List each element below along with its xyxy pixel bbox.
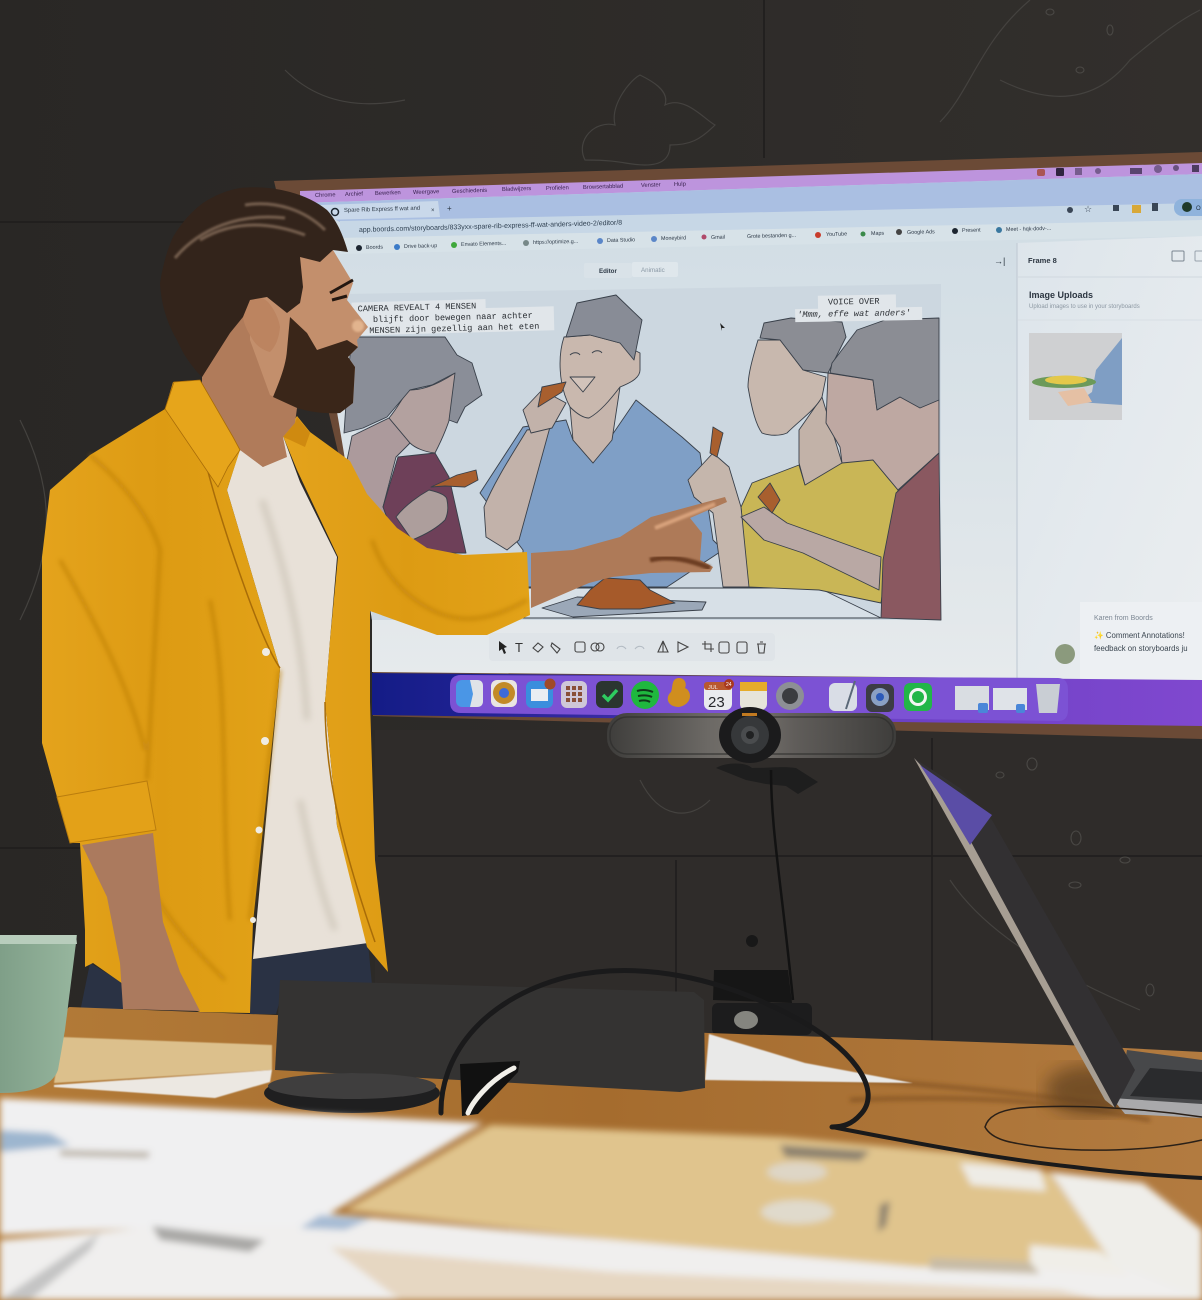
paper markings <box>767 1162 827 1182</box>
cable under webcam <box>771 770 793 1000</box>
right forearm and hand <box>531 497 727 608</box>
caption left <box>352 297 554 337</box>
illustrated woman left <box>344 337 482 553</box>
macOS menu bar: Archief <box>345 191 363 198</box>
browser chrome <box>300 174 1202 254</box>
lower white and peach sheets <box>0 1213 1202 1300</box>
drawing toolbar <box>489 633 775 661</box>
right sidebar: Upload images to use in your storyboards <box>1029 304 1140 310</box>
macOS menu bar: Browsertabblad <box>583 184 623 191</box>
browser chrome: Maps <box>871 231 885 237</box>
charging puck <box>264 1073 440 1113</box>
right sidebar: Frame 8 <box>1028 256 1057 265</box>
browser chrome: Grote bestanden g... <box>747 233 796 240</box>
macOS menu bar <box>300 163 1202 203</box>
browser chrome: Data Studio <box>607 237 635 244</box>
blurred foreground papers <box>0 1098 1202 1300</box>
beard <box>273 317 358 413</box>
table top <box>0 1007 1202 1300</box>
left white paper <box>0 1098 483 1235</box>
illustrated plate of chicken <box>542 578 706 617</box>
right sidebar: Image Uploads <box>1029 290 1093 300</box>
laptop screen reflection <box>920 765 992 845</box>
browser chrome: YouTube <box>826 231 847 238</box>
papers on the table <box>54 1034 913 1098</box>
webcam soundbar <box>607 707 896 794</box>
black and white cables <box>441 971 1202 1150</box>
browser chrome: Meet - hqk-dodv-... <box>1006 226 1051 233</box>
screen frame <box>274 152 1202 739</box>
macOS menu bar: Bewerken <box>375 190 401 197</box>
macOS dock <box>372 673 1202 726</box>
browser chrome: Moneybird <box>661 235 686 242</box>
laptop hinge and keyboard base <box>1112 1050 1202 1118</box>
macOS menu bar: Profielen <box>546 185 569 192</box>
right sidebar: →| <box>994 256 1005 266</box>
cable over papers <box>832 1127 1202 1178</box>
shirt front right panel and arm <box>283 416 530 972</box>
chat bubble <box>1080 602 1202 680</box>
browser chrome: Present <box>962 228 981 234</box>
dock app icons: 23 <box>708 694 725 711</box>
cable port <box>460 1061 520 1116</box>
placket buttons <box>204 446 270 923</box>
face <box>250 250 368 413</box>
tan paper <box>345 1125 1112 1267</box>
laptop edge strip <box>914 758 1115 1108</box>
right sidebar <box>994 236 1202 680</box>
shirt cuff left <box>57 781 156 843</box>
laptop screen back <box>914 758 1135 1108</box>
editor tabs: Editor <box>599 268 617 275</box>
illustrated man centre <box>480 295 723 587</box>
browser chrome: app.boords.com/storyboards/833yxx-spare-rib-express-ff-wat-anders-video-2/editor/8 <box>359 220 622 234</box>
storyboard frame illustration <box>344 284 941 620</box>
shirt folds and shading <box>60 455 527 980</box>
shirt main body and left sleeve <box>42 380 280 1013</box>
macOS menu bar: Chrome <box>315 192 336 199</box>
caption left: MENSEN zijn gezellig aan het eten <box>369 322 540 336</box>
browser chrome: ☆ <box>1084 204 1092 214</box>
chat avatar <box>1055 644 1075 664</box>
editor tabs: Animatic <box>641 267 665 274</box>
caption right <box>795 294 922 322</box>
dock app icons: JUL <box>708 685 718 691</box>
wall outlet hub <box>712 935 812 1035</box>
collar left <box>165 380 240 487</box>
left forearm <box>82 833 200 1011</box>
screen app background <box>300 164 1202 680</box>
dock app icons: 24 <box>726 682 732 688</box>
browser chrome: Boords <box>366 245 383 251</box>
browser chrome: Drive back-up <box>404 243 437 250</box>
browser chrome: Gmail <box>711 235 725 241</box>
chat bubble: feedback on storyboards ju <box>1094 644 1188 653</box>
browser chrome: + <box>447 204 452 213</box>
macOS menu bar: Geschiedenis <box>452 188 487 195</box>
macOS menu bar: Venster <box>641 182 661 189</box>
head <box>160 187 368 413</box>
neck <box>202 300 297 467</box>
browser chrome: O <box>1196 206 1201 212</box>
editor tabs <box>584 262 678 278</box>
browser chrome: https://optimize.g... <box>533 239 578 246</box>
caption right: 'Mmm, effe wat anders' <box>797 308 911 320</box>
t-shirt <box>227 436 368 959</box>
macOS menu bar: Bladwijzers <box>502 186 531 193</box>
chat bubble: ✨ Comment Annotations! <box>1094 631 1185 640</box>
eyebrow and eye <box>330 280 353 300</box>
browser chrome: Google Ads <box>907 229 935 236</box>
hair <box>160 187 348 377</box>
drawing toolbar: T <box>515 640 523 655</box>
chat bubble: Karen from Boords <box>1094 615 1153 622</box>
caption right: VOICE OVER <box>828 297 880 308</box>
laptop <box>914 758 1202 1118</box>
black dock device <box>264 980 705 1116</box>
collar right <box>283 417 310 447</box>
dock app icons <box>456 678 1060 713</box>
coffee mug <box>0 935 77 1093</box>
illustrated man far right <box>826 318 941 620</box>
ear <box>243 297 280 352</box>
browser chrome: Spare Rib Express ff wat and <box>344 206 420 214</box>
wall-mounted display <box>274 152 1202 739</box>
jeans <box>80 943 372 1014</box>
mouse cursor <box>720 323 725 331</box>
nose highlight <box>352 320 364 332</box>
caption left: CAMERA REVEALT 4 MENSEN <box>358 301 476 314</box>
caption left: blijft door bewegen naar achter <box>373 311 533 325</box>
uploaded image thumbnail <box>1029 333 1122 420</box>
illustrated table with plate <box>460 588 881 618</box>
macOS menu bar: Weergave <box>413 189 439 196</box>
illustrated woman right <box>688 318 898 603</box>
macOS menu bar: Hulp <box>674 182 686 188</box>
browser chrome: × <box>431 208 435 214</box>
presenter <box>42 187 727 1014</box>
browser chrome: Envato Elements... <box>461 241 506 248</box>
right white paper <box>1000 1172 1202 1300</box>
